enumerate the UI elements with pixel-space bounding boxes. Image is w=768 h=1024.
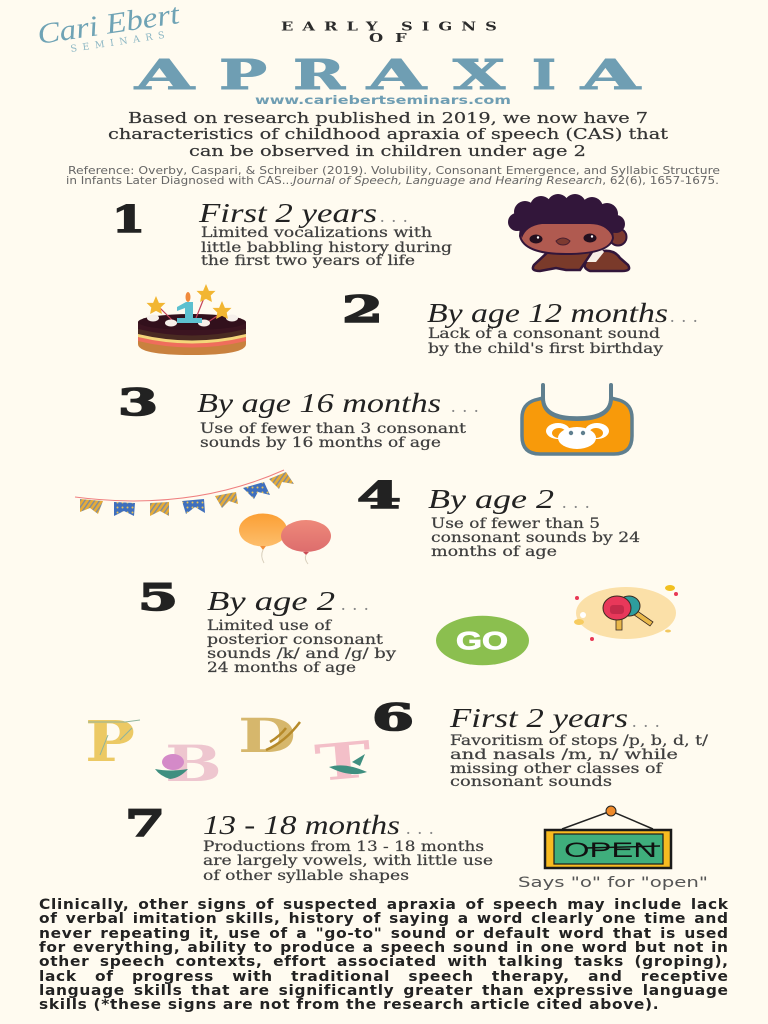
heading 1: First 2 years [198,198,377,228]
text 2: by the child's first birthday [428,341,663,357]
text 1: Limited vocalizations with [201,225,432,241]
text 4: Use of fewer than 5 [431,516,600,532]
title: APRAXIA [133,51,642,99]
icon: keys [574,585,678,641]
logo: Cari Ebert Seminars: Cari Ebert [35,0,183,51]
letter D [238,709,300,764]
text 7: of other syllable shapes [203,868,409,884]
text 6: Favoritism of stops /p, b, d, t/ [450,733,709,749]
text 1 [201,225,452,269]
title: APRAXIA: X [453,51,505,99]
text 3: sounds by 16 months of age [200,435,441,451]
dots 2: ... [670,306,704,326]
text 5: posterior consonant [207,632,384,648]
item 6: first two years [372,697,709,790]
item 5: by age 2 [138,577,396,676]
title: early signs of [281,19,497,45]
text 6: and nasals /m, n/ while [450,747,678,763]
title: APRAXIA: I [532,51,556,99]
website URL: www.cariebertseminars.com [255,93,511,107]
number 2: 2 [342,289,383,331]
text 4: months of age [431,544,557,560]
item 7: 13 to 18 months [125,803,493,884]
reference citation [66,165,720,187]
intro text: can be observed in children under age 2 [189,142,586,160]
text 6: consonant sounds [450,774,612,790]
item 2: by age 12 months [342,289,704,357]
text 3: Use of fewer than 3 consonant [200,421,467,437]
intro text: characteristics of childhood apraxia of speech (CAS) that [108,125,668,143]
title: APRAXIA: R [293,51,346,99]
heading 6: First 2 years [449,703,628,733]
closing paragraph: other speech contexts, effort associated with talking tasks (groping), [38,954,728,970]
illustration: balloons [239,514,331,564]
text 7 [203,839,493,884]
reference citation: Reference: Overby, Caspari, & Schreiber (2019). Volubility, Consonant Emergence, and Syllabic Structure [68,165,720,177]
heading 5: By age 2 [207,586,335,616]
icon: crawling baby [508,194,629,271]
text 5: Limited use of [207,618,332,634]
text 7: Productions from 13 - 18 months [203,839,484,855]
item 3: by age 16 months [118,382,486,451]
heading 7: 13 - 18 months [203,810,400,840]
text 1: the first two years of life [201,253,415,269]
reference citation: in Infants Later Diagnosed with CAS... Journal of Speech, Language and Hearing Research , 62(6), 1657-1675. [66,175,719,187]
closing paragraph: of verbal imitation skills, history of saying a word clearly one time and [38,911,728,927]
letter T [313,729,374,793]
closing paragraph: language skills that are significantly greater than expressive language [38,983,728,999]
text 5: sounds /k/ and /g/ by [207,646,396,662]
closing paragraph [38,897,728,1013]
dots 3: ... [451,396,486,416]
number 5: 5 [138,577,178,619]
text 2: Lack of a consonant sound [428,326,660,342]
item 4: by age 2 [357,475,640,560]
title: early signs of: EARLY SIGNS [281,19,497,34]
dots 5: ... [341,594,376,614]
text 7: are largely vowels, with little use [203,853,493,869]
icon: GO button: GO [456,628,508,656]
letter B: B [165,734,222,793]
title: early signs of: OF [369,31,407,45]
title: APRAXIA: P [219,51,267,99]
closing paragraph: skills (*these signs are not from the research article cited above). [38,997,659,1013]
closing paragraph: Clinically, other signs of suspected apraxia of speech may include lack [38,897,728,913]
baby hair [508,194,625,238]
number 3: 3 [118,382,158,424]
intro text: Based on research published in 2019, we now have 7 [128,109,648,127]
text 6: missing other classes of [450,761,663,777]
dots 7: ... [406,818,440,838]
title: APRAXIA: A [133,51,196,99]
text 1: little babbling history during [201,240,452,256]
title: APRAXIA: A [365,51,428,99]
dots 1: ... [380,206,414,226]
number 6: 6 [372,697,414,739]
text 2 [428,326,663,357]
item 1: first two years [112,198,452,269]
text 5: 24 months of age [207,660,356,676]
closing paragraph: lack of progress with traditional speech therapy, and receptive [38,969,728,985]
letter T: T [313,729,374,793]
icon: birthday cake [138,284,246,355]
illustration: bunting banner [75,470,294,516]
closing paragraph: never repeating it, use of a "go-to" sound or default word that is used [38,926,728,942]
closing paragraph: for everything, ability to produce a speech sound in one word but not in [38,940,728,956]
text 5 [207,618,396,676]
caption: says o for open: Says "o" for "open" [518,875,708,891]
heading 4: By age 2 [428,484,554,514]
icon: open sign [545,806,671,868]
text 3 [200,421,467,451]
number 1: 1 [112,199,145,241]
letter D: D [238,709,296,764]
text 4 [431,516,640,560]
number 4: 4 [357,475,401,517]
dots 4: ... [562,492,596,512]
title: APRAXIA: A [579,51,642,99]
number 7: 7 [125,803,165,845]
heading 3: By age 16 months [197,388,441,418]
dots 6: ... [632,711,666,731]
icon: open sign: OPEN [564,839,657,862]
illustration: letters P B D T [85,709,374,793]
letter B [155,734,222,793]
intro text [108,109,668,160]
text 6 [450,733,709,790]
icon: baby bib [522,385,632,454]
text 4: consonant sounds by 24 [431,530,640,546]
icon: GO button [436,616,529,665]
logo: Cari Ebert Seminars: SEMINARS [70,30,165,55]
heading 2: By age 12 months [427,298,668,328]
letter P: P [85,709,135,775]
